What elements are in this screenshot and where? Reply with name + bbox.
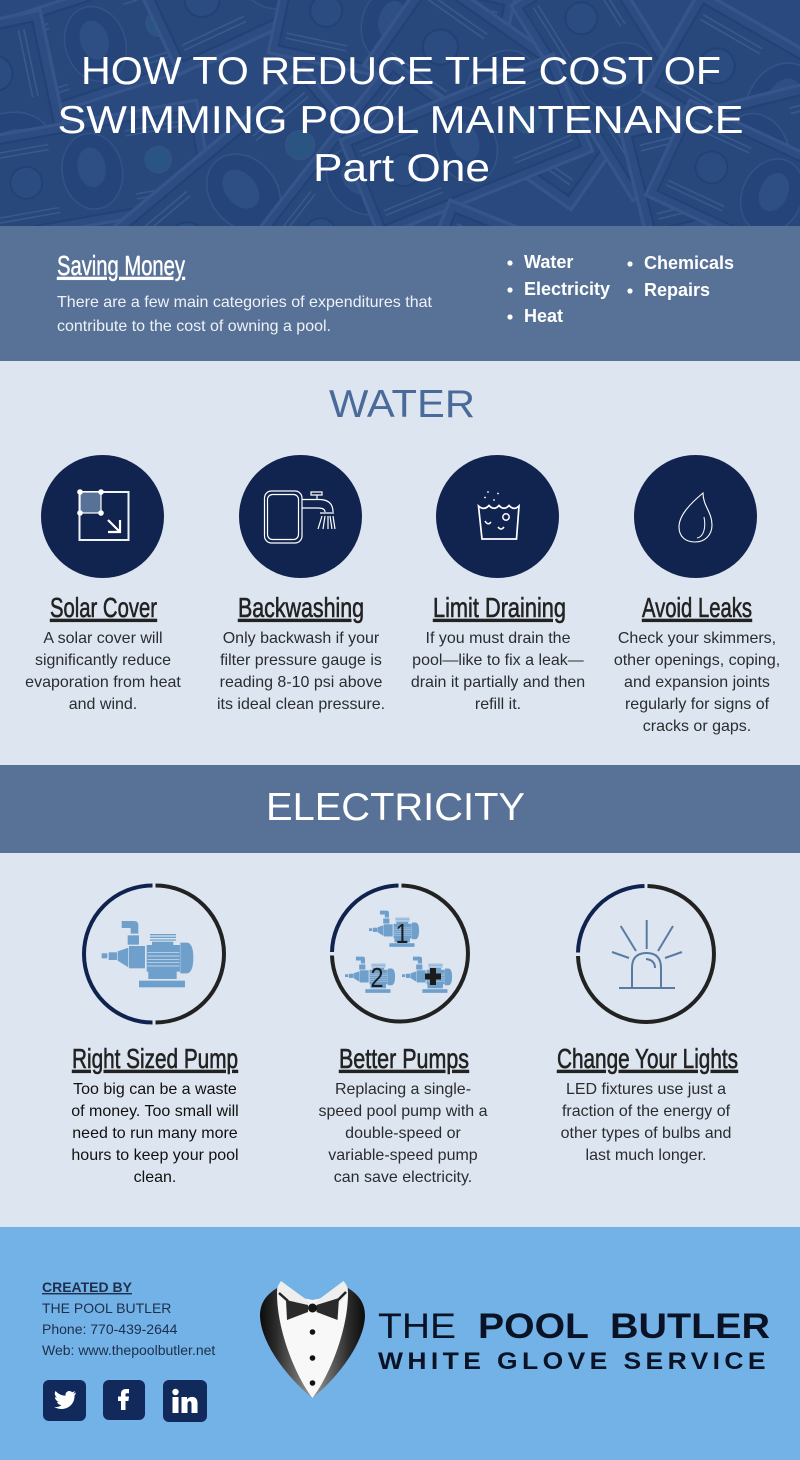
panel: backwashing: Only backwash if your [223,630,380,647]
panel: better pumps: can save electricity. [334,1169,472,1186]
panel: solar cover: evaporation from heat [25,674,181,691]
panel: change your lights: fraction of the energy of [562,1103,731,1120]
icon: tub and faucet [239,455,362,578]
panel: right sized pump: clean. [134,1169,176,1186]
panel: limit draining: If you must drain the [426,630,571,647]
panel: change your lights: Change Your Lights [557,1043,738,1074]
panel: avoid leaks: Avoid Leaks [642,592,752,623]
panel: backwashing: filter pressure gauge is [220,652,382,669]
panel: better pumps [318,886,488,1186]
icon: linkedin [163,1380,207,1422]
panel: avoid leaks [614,455,780,735]
icon: large pump in ring [84,886,224,1022]
panel: solar cover: significantly reduce [35,652,171,669]
bullet list: categories: Chemicals [644,253,734,273]
panel: solar cover [25,455,181,713]
intro text: contribute to the cost of owning a pool. [57,318,331,335]
panel: limit draining [411,455,585,713]
panel: solar cover: A solar cover will [43,630,163,647]
icon: three pumps in ring: 2 [370,962,384,993]
panel: better pumps: speed pool pump with a [318,1103,488,1120]
panel: right sized pump: Too big can be a waste [73,1081,237,1098]
panel: change your lights: other types of bulbs and [561,1125,731,1142]
credits text: Phone: 770-439-2644 [42,1321,178,1337]
footer panel [0,1227,800,1460]
bullet list: categories: Heat [524,306,563,326]
heading: saving money: Saving Money [57,250,185,281]
credits text: CREATED BY [42,1279,133,1295]
band: electricity heading [0,765,800,853]
panel: backwashing [217,455,385,713]
logo: wordmark: POOL [478,1307,589,1346]
panel: avoid leaks: regularly for signs of [625,696,770,713]
panel: solar cover: and wind. [69,696,137,713]
money photo texture [0,0,800,226]
panel: right sized pump: need to run many more [72,1125,238,1142]
logo: wordmark: BUTLER [610,1307,770,1346]
logo: tuxedo [260,1281,365,1398]
icon: three pumps in ring [332,886,468,1021]
icon: three pumps in ring: 1 [396,918,408,949]
bullet list: categories [507,252,734,326]
credits text: Web: www.thepoolbutler.net [42,1342,215,1358]
intro text [57,294,433,335]
panel: right sized pump: Right Sized Pump [72,1043,238,1074]
logo: wordmark [378,1307,770,1375]
panel: better pumps: Replacing a single- [335,1081,471,1098]
panel: change your lights: LED fixtures use just a [566,1081,726,1098]
panel: backwashing: Backwashing [238,592,364,623]
credits text [42,1279,215,1358]
title: SWIMMING POOL MAINTENANCE [58,99,744,142]
icon: water drop [634,455,757,578]
panel: change your lights [557,886,738,1164]
header panel: dollar bills background with title [0,0,800,226]
credits text: THE POOL BUTLER [42,1300,171,1316]
icon: twitter [43,1380,86,1421]
band: electricity heading: ELECTRICITY [266,786,525,829]
panel: better pumps: variable-speed pump [328,1147,478,1164]
panel: backwashing: reading 8-10 psi above [220,674,382,691]
panel: avoid leaks: other openings, coping, [614,652,780,669]
bullet list: categories: Repairs [644,280,710,300]
intro text: There are a few main categories of expenditures that [57,294,433,311]
logo: wordmark: THE [378,1307,456,1346]
panel: saving money intro [0,226,800,361]
panel: limit draining: drain it partially and then [411,674,585,691]
icon: water bucket [436,455,559,578]
panel: solar cover: Solar Cover [50,592,157,623]
panel: right sized pump: hours to keep your pool [71,1147,239,1164]
title: HOW TO REDUCE THE COST OF [81,50,721,93]
panel: backwashing: its ideal clean pressure. [217,696,385,713]
panel: change your lights: last much longer. [586,1147,706,1164]
panel: better pumps: double-speed or [345,1125,461,1142]
panel: right sized pump [71,886,239,1186]
logo: wordmark: WHITE GLOVE SERVICE [378,1348,770,1375]
panel: avoid leaks: Check your skimmers, [618,630,776,647]
panel: avoid leaks: cracks or gaps. [643,718,751,735]
icon: solar cover [41,455,164,578]
title [58,50,744,190]
title: Part One [313,147,490,190]
panel: limit draining: refill it. [475,696,521,713]
panel: limit draining: Limit Draining [433,592,566,623]
panel: better pumps: Better Pumps [339,1043,469,1074]
bullet list: categories: Water [524,252,573,272]
bullet list: categories: Electricity [524,279,610,299]
panel: right sized pump: of money. Too small will [71,1103,239,1120]
icon: facebook [103,1380,145,1420]
panel: avoid leaks: and expansion joints [624,674,770,691]
panel: limit draining: pool—like to fix a leak— [412,652,584,669]
icon: light in ring [578,886,714,1022]
heading: water: WATER [329,383,475,426]
